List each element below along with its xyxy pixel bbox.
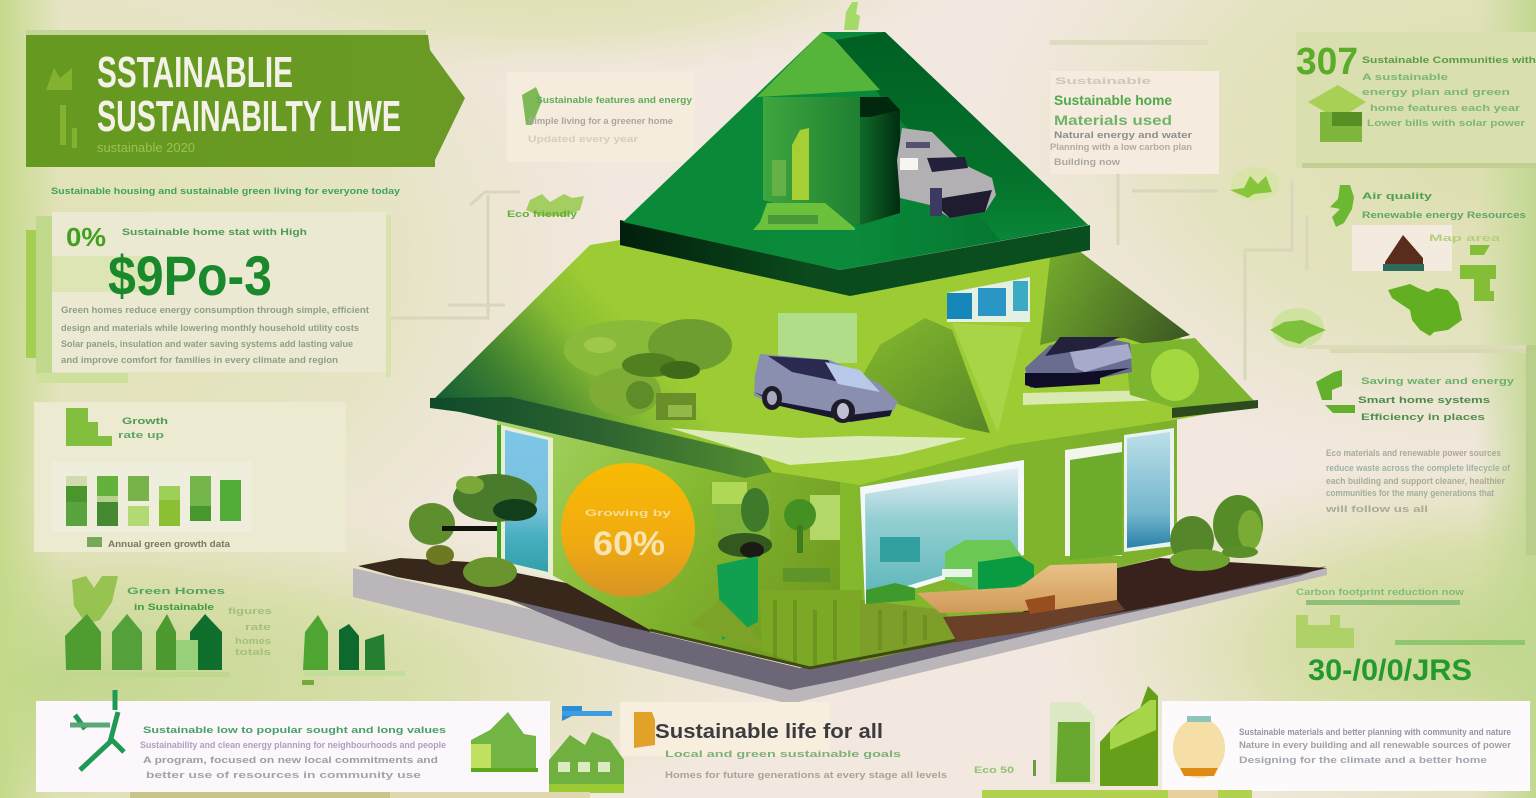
panel: right text: reduce waste across the complete lifecycle of	[1326, 463, 1511, 473]
title banner: SUSTAINABILTY LIWE	[97, 92, 401, 141]
roof eave band	[430, 397, 772, 478]
panel: lower-right stat: Carbon footprint reduction now	[1296, 587, 1465, 597]
panel: lower-left stats with houses: figures	[228, 606, 272, 616]
panel: top right stat: A sustainable	[1362, 72, 1448, 82]
roof pale panel	[778, 313, 857, 363]
icon: roof sprout	[844, 2, 860, 30]
icon: green house	[1308, 85, 1366, 142]
panel: savings stat	[26, 212, 391, 383]
icon: green blob map	[1388, 284, 1462, 336]
panel: bottom left banner: better use of resources in community use	[146, 770, 421, 780]
bushes right	[1170, 495, 1263, 571]
panel: right map block	[1330, 185, 1526, 336]
panel: top right stat: Sustainable Communities with	[1362, 55, 1536, 65]
callout: top centre label: Sustainable features and energy	[536, 95, 692, 105]
title banner: sustainable 2020	[97, 140, 195, 155]
panel: lower-left stats with houses: totals	[235, 647, 271, 657]
title banner	[26, 30, 465, 167]
panel: right text: Efficiency in places	[1361, 412, 1485, 422]
stat value: $9Po-3	[108, 244, 272, 307]
door	[1065, 428, 1174, 560]
panel: right text: will follow us all	[1325, 504, 1428, 514]
icon: brown hut	[1383, 235, 1424, 271]
panel: right map block: Map area	[1429, 233, 1502, 243]
yellow badge: Growing by	[585, 508, 671, 518]
panel: top right stat: home features each year	[1370, 103, 1521, 113]
bars	[66, 476, 241, 526]
panel: lower-left stats with houses: in Sustainable	[134, 602, 214, 612]
panel: bottom right banner: Sustainable materials and better planning with community and nature	[1239, 727, 1511, 737]
ground platform	[353, 558, 1327, 704]
icon: house row 2	[302, 615, 405, 685]
callout: top centre label	[507, 72, 695, 162]
panel: top right stat: 307	[1296, 41, 1358, 83]
panel: right map block: Air quality	[1362, 191, 1432, 201]
icon: blue arrow	[562, 706, 612, 721]
panel: right text: Smart home systems	[1358, 395, 1490, 405]
panel: bottom centre heading: Sustainable life for all	[655, 721, 883, 743]
panel: right text: Eco materials and renewable power sources	[1326, 448, 1501, 458]
icon: small leaf label: Eco friendly	[507, 209, 577, 219]
panel: savings stat: and improve comfort for families in every climate and region	[61, 355, 338, 365]
panel: bar chart: Growth	[122, 416, 168, 426]
callout: top right label: Natural energy and water	[1054, 130, 1193, 140]
wooden boxes	[917, 563, 1125, 642]
lower roof	[430, 240, 1258, 485]
roof facet dark	[860, 318, 990, 433]
callout: top centre label: Simple living for a greener home	[528, 116, 673, 126]
panel: savings stat: Green homes reduce energy consumption through simple, efficient	[61, 305, 369, 315]
callout: top centre label: Updated every year	[528, 134, 639, 144]
panel: bottom right banner: Nature in every building and all renewable sources of power	[1239, 740, 1512, 750]
big window	[860, 460, 1034, 604]
icon: people network	[70, 690, 124, 770]
car: silver	[897, 128, 996, 218]
bottom strip	[130, 790, 1252, 798]
front grass	[650, 590, 957, 668]
icon: ring	[1330, 185, 1354, 227]
panel: lower-left stats with houses: homes	[235, 636, 271, 646]
roof gable	[757, 32, 880, 97]
bottom band	[36, 701, 1530, 792]
yellow badge	[561, 463, 695, 597]
icon: top right leaf tag	[1230, 167, 1279, 201]
callout: top right label: Sustainable home	[1054, 92, 1172, 108]
panel: right text: communities for the many generations that	[1326, 488, 1494, 498]
panel: bottom right banner: Designing for the climate and a better home	[1239, 755, 1487, 765]
panel: bar chart: Annual green growth data	[108, 539, 231, 549]
subtitle line: Sustainable housing and sustainable green living for everyone today	[51, 186, 400, 196]
panel: lower-left stats with houses: Green Homes	[127, 586, 225, 596]
icon: recycle leaf	[72, 576, 118, 624]
icon: small plant	[1460, 245, 1496, 301]
icon: green house outline	[471, 712, 538, 772]
icon: green towers: Eco 50	[974, 765, 1014, 775]
roof trees	[564, 319, 732, 420]
icon: green house windows	[549, 732, 624, 793]
panel: bottom left banner	[70, 690, 624, 793]
right lower roof	[1125, 338, 1258, 408]
panel: lower-left stats with houses: rate	[245, 622, 271, 632]
icon: house row	[55, 614, 230, 677]
roof window	[947, 277, 1030, 322]
left window	[497, 425, 553, 578]
panel: lower-right stat	[1296, 587, 1525, 687]
panel: bottom left banner: Sustainability and clean energy planning for neighbourhoods and people	[140, 740, 446, 750]
panel: right map block: Renewable energy Resources	[1362, 210, 1526, 220]
callout: top right label	[1050, 40, 1219, 174]
car: dark blue	[1025, 337, 1132, 388]
icon: gold medal	[1173, 716, 1225, 778]
panel: bar chart: rate up	[118, 430, 165, 440]
icon: chart	[66, 408, 112, 446]
panel: savings stat: design and materials while lowering monthly household utility costs	[61, 323, 359, 333]
wall plants	[710, 482, 840, 640]
panel: lower-right stat: 30-/0/0/JRS	[1308, 654, 1472, 687]
callout: top right label: Building now	[1054, 157, 1121, 167]
panel: right text	[1306, 345, 1536, 555]
chimney box	[753, 97, 900, 230]
icon: small leaf label	[507, 194, 584, 219]
icon: sprout	[1316, 370, 1355, 413]
panel: right text: Saving water and energy	[1361, 376, 1514, 386]
icon: leaf mark	[522, 87, 542, 125]
panel: top right stat: Lower bills with solar power	[1367, 118, 1526, 128]
panel: bottom left banner: A program, focused on new local commitments and	[143, 755, 438, 765]
panel: bottom centre heading: Homes for future generations at every stage all levels	[665, 770, 947, 780]
connector lines	[390, 173, 1307, 380]
yellow badge: 60%	[593, 525, 665, 563]
icon: green towers	[974, 686, 1158, 786]
panel: lower-left stats with houses	[55, 576, 405, 685]
left wall	[497, 420, 860, 668]
panel: bottom left banner: Sustainable low to popular sought and long values	[143, 725, 446, 735]
dark roof half	[835, 32, 1088, 240]
right wall	[840, 395, 1177, 664]
right olive facet	[1040, 250, 1190, 346]
panel: bar chart	[34, 402, 346, 552]
panel: bottom right banner	[1173, 716, 1512, 778]
trees left	[409, 474, 537, 587]
callout: top right label: Materials used	[1054, 112, 1172, 128]
panel: savings stat: Sustainable home stat with High	[122, 227, 307, 237]
panel: bottom centre heading	[634, 712, 947, 780]
icon: bar blocks	[1296, 615, 1354, 648]
panel: savings stat: Solar panels, insulation and water saving systems add lasting value	[61, 339, 353, 349]
title banner: SSTAINABLIE	[97, 48, 293, 97]
icon: orange tag	[634, 712, 655, 748]
callout: top right label: Sustainable	[1055, 76, 1151, 86]
pale strips	[670, 428, 967, 465]
panel: bottom centre heading: Local and green sustainable goals	[665, 749, 901, 759]
panel: top right stat	[1296, 32, 1536, 168]
top roof	[620, 2, 1090, 296]
panel: top right stat: energy plan and green	[1362, 87, 1510, 97]
panel: right text: each building and support cleaner, healthier	[1326, 476, 1505, 486]
icon: banner plant	[46, 68, 77, 148]
icon: percent: 0%	[66, 222, 106, 252]
house	[497, 395, 1177, 668]
car: silver-blue	[754, 354, 898, 423]
callout: top right label: Planning with a low carbon plan	[1050, 142, 1192, 152]
pale triangle	[952, 323, 1023, 433]
icon: mid right leaf tag	[1270, 308, 1326, 348]
